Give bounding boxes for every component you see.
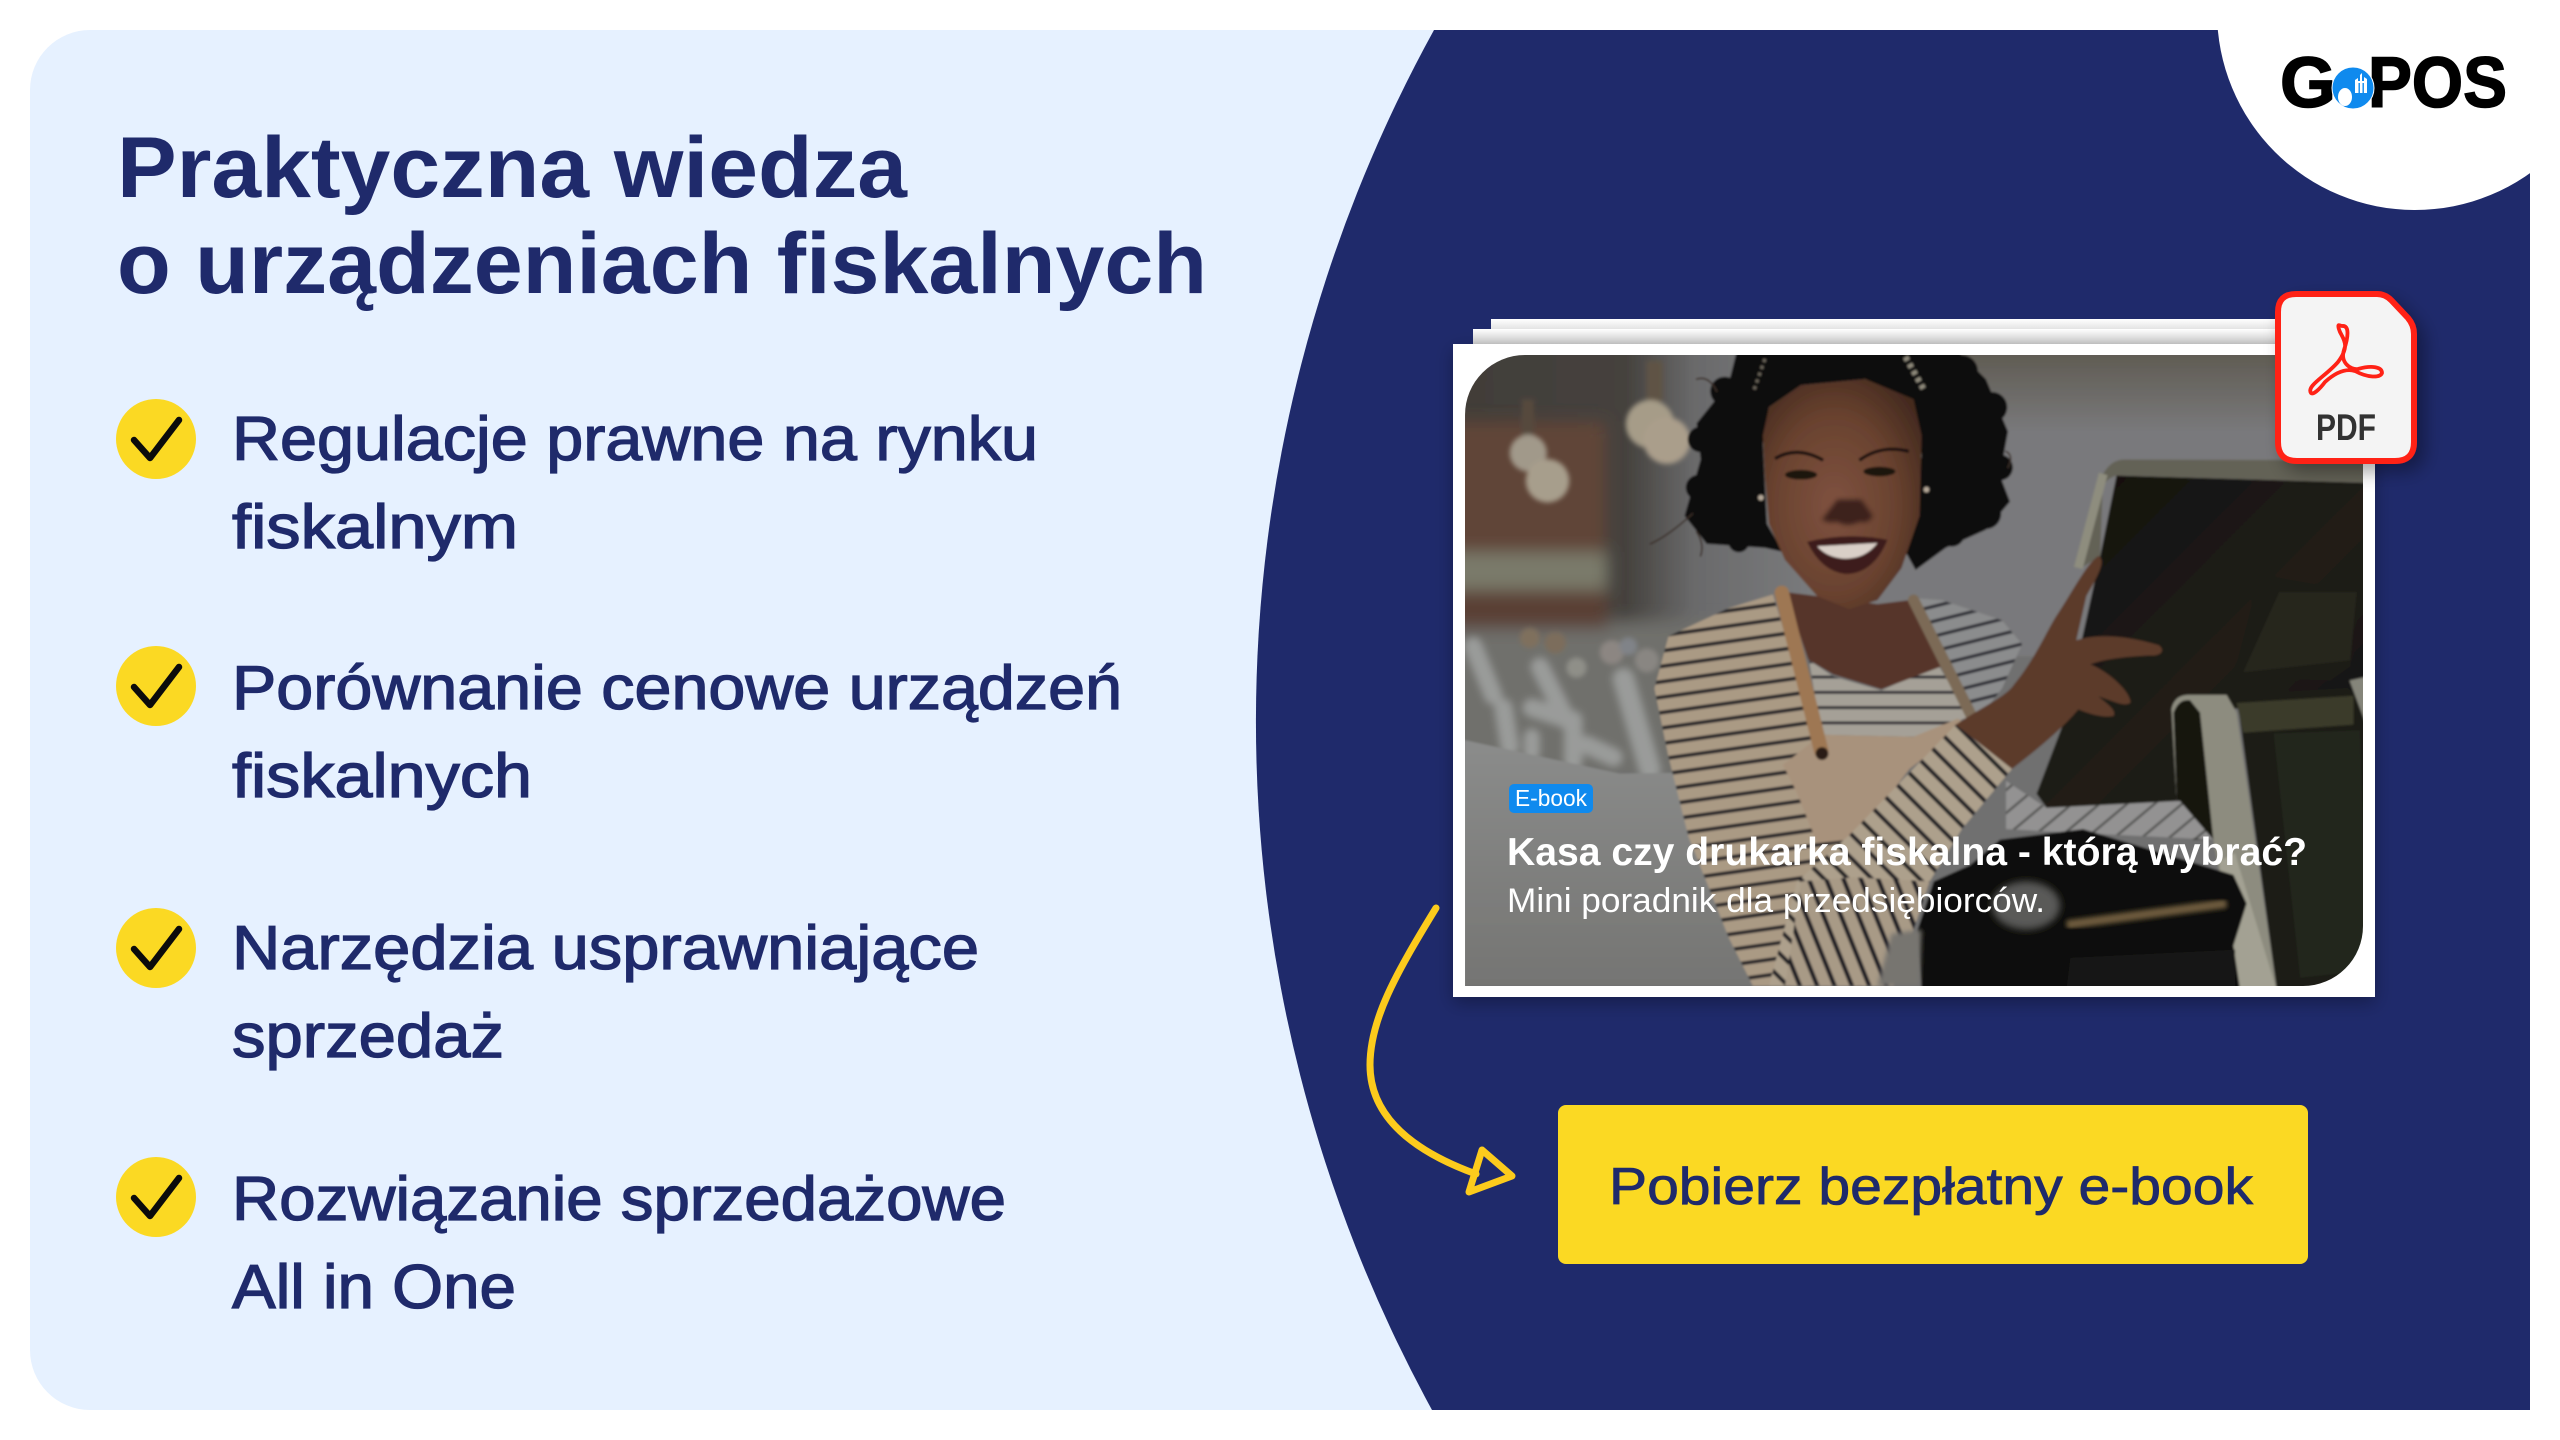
icon: check bbox=[116, 646, 196, 726]
icon: check bbox=[116, 1157, 196, 1237]
icon: PDF document bbox=[2278, 294, 2414, 461]
list item: sales tools bbox=[116, 908, 979, 1071]
list item: regulations: Regulacje prawne na rynku bbox=[232, 405, 1038, 474]
arrow: from cover to button bbox=[1370, 908, 1512, 1192]
icon: check bbox=[116, 399, 196, 479]
dark base bbox=[1918, 829, 2247, 991]
middle sheet bbox=[1473, 329, 2293, 349]
photo: smiling cashier at POS terminal bbox=[1447, 351, 2368, 991]
cover subtitle: Mini poradnik dla przedsiębiorców. bbox=[1507, 882, 2045, 920]
title: o urządzeniach fiskalnych bbox=[117, 216, 1207, 312]
front sheet bbox=[1453, 344, 2375, 997]
PDF label: PDF bbox=[2316, 407, 2376, 448]
button: download e-book bbox=[1558, 1105, 2308, 1264]
list item: regulations bbox=[116, 399, 1038, 562]
title: Praktyczna wiedza bbox=[117, 120, 908, 216]
stand base bbox=[2240, 707, 2363, 986]
logo: GoPOS bbox=[2280, 44, 2507, 123]
logo badge: white circle bbox=[2218, 30, 2530, 210]
hairband bbox=[1906, 357, 1924, 389]
shirt body bbox=[1654, 594, 1857, 986]
apron straps bbox=[1782, 593, 1972, 760]
logo: GoPOS: POS bbox=[2368, 44, 2507, 123]
button: download e-book: Pobierz bezpłatny e-book bbox=[1609, 1158, 2254, 1216]
list item: sales tools: sprzedaż bbox=[232, 1002, 504, 1071]
panel: light blue background bbox=[30, 30, 1500, 1410]
list item: price comparison bbox=[116, 646, 1122, 811]
list item: regulations: fiskalnym bbox=[232, 493, 518, 562]
glassware bbox=[1473, 646, 1650, 770]
far sleeve bbox=[2006, 781, 2213, 840]
hair bbox=[1650, 351, 2013, 570]
cover title: Kasa czy drukarka fiskalna - którą wybrać? bbox=[1507, 831, 2307, 874]
POS terminal bbox=[2037, 459, 2368, 991]
ebook cover stack bbox=[1447, 294, 2414, 997]
face bbox=[1763, 379, 1922, 609]
counter bbox=[1465, 740, 1735, 954]
neckline stripes bbox=[1809, 660, 1970, 737]
wall bbox=[1465, 640, 2276, 986]
list item: sales tools: Narzędzia usprawniające bbox=[232, 914, 979, 983]
facial features bbox=[1758, 449, 1929, 574]
list item: all in one bbox=[116, 1157, 1006, 1322]
list item: price comparison: fiskalnych bbox=[232, 742, 532, 811]
badge: E-book: E-book bbox=[1515, 785, 1587, 811]
logo: GoPOS: G bbox=[2280, 44, 2336, 123]
icon: check bbox=[116, 908, 196, 988]
hair strands bbox=[1650, 378, 2011, 556]
back sheet bbox=[1491, 319, 2291, 343]
list item: price comparison: Porównanie cenowe urządzeń bbox=[232, 654, 1122, 723]
chest bbox=[1785, 592, 1942, 689]
title bbox=[117, 120, 1207, 312]
icon: spoon and fork circle bbox=[2332, 67, 2374, 109]
bezel bbox=[2081, 459, 2368, 568]
panel: navy curved area bbox=[1256, 30, 2530, 1410]
Acrobat symbol bbox=[2310, 325, 2382, 393]
blurred bar interior bbox=[1465, 416, 1686, 741]
bokeh lights bbox=[1510, 361, 1690, 678]
forearm sleeve bbox=[1769, 725, 2012, 986]
list item: all in one: All in One bbox=[232, 1253, 516, 1322]
white stand bbox=[2172, 695, 2277, 991]
screen back bbox=[2037, 476, 2368, 808]
right shoulder bbox=[1920, 598, 2022, 712]
list item: all in one: Rozwiązanie sprzedażowe bbox=[232, 1165, 1006, 1234]
stand box bbox=[2233, 574, 2357, 680]
apron bbox=[1783, 719, 1968, 843]
hand bbox=[1956, 556, 2162, 769]
